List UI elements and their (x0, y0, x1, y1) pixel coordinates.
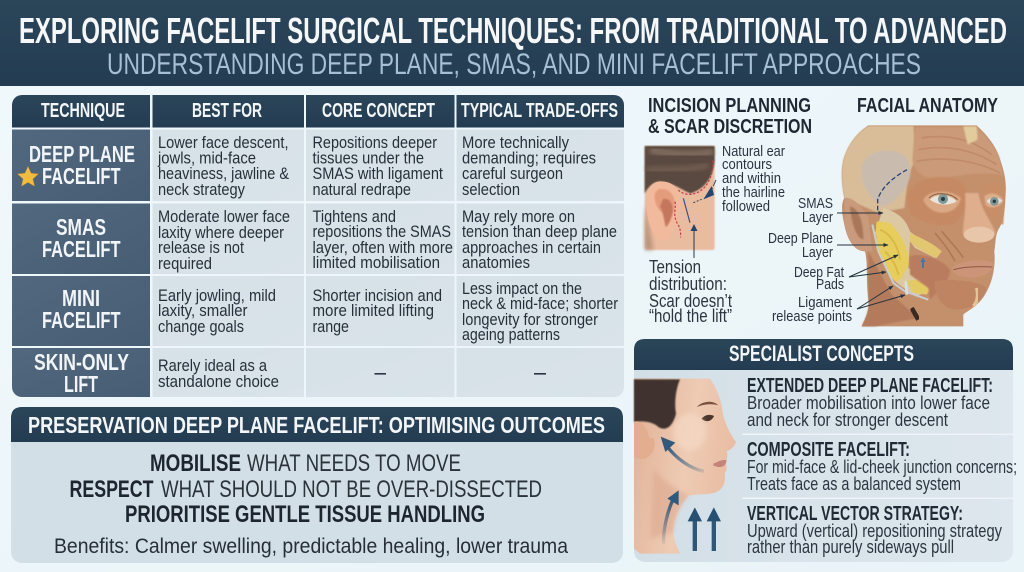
label: smas layer (798, 195, 883, 226)
deep plane: core concept (312, 133, 443, 199)
skin-only: best for (158, 356, 279, 391)
panel: specialist concepts (634, 339, 1017, 562)
arrow: neck lift (663, 490, 679, 544)
tension note: Scar doesn’t (649, 291, 732, 311)
label: deep plane layer: Layer (802, 244, 833, 261)
incision heading (648, 94, 812, 138)
label: ligament release points: Ligament (798, 294, 853, 311)
label: smas layer: SMAS (798, 195, 833, 212)
mini: best for: Early jowling, mild (158, 286, 276, 305)
smas: trade-offs: approaches in certain (462, 238, 601, 257)
smas: trade-offs: anatomies (462, 253, 530, 272)
face anatomy illustration (842, 125, 1006, 326)
panel: preservation deep plane facelift (11, 407, 623, 563)
row label: skin-only lift (34, 349, 129, 397)
eyes (930, 195, 957, 204)
dashed smas line (878, 170, 907, 213)
arrow: vertical right (707, 507, 721, 551)
incision heading: & SCAR DISCRETION (648, 115, 812, 138)
concept: vertical vector strategy: rather than purely sideways pull (747, 537, 954, 557)
deep plane: best for: neck strategy (158, 180, 245, 199)
ear contours note (722, 143, 785, 215)
mini: core concept: Shorter incision and (312, 286, 442, 305)
skin-only: trade-offs dash (534, 373, 546, 375)
arrow: tension (690, 224, 698, 258)
skin-only: best for: Rarely ideal as a (158, 356, 267, 375)
icon: star (18, 166, 38, 186)
line: respect: WHAT SHOULD NOT BE OVER-DISSECTED (161, 476, 542, 503)
deep plane: trade-offs: careful surgeon (462, 164, 563, 183)
profile face illustration (634, 379, 736, 554)
row label: smas facelift (42, 214, 121, 262)
concept: extended deep plane (747, 375, 993, 430)
title banner (0, 0, 1024, 86)
mini: core concept: more limited lifting (312, 301, 434, 320)
label: deep plane layer: Deep Plane (768, 230, 833, 247)
smas: core concept: Tightens and (312, 207, 396, 226)
deep plane: best for: heaviness, jawline & (158, 164, 290, 183)
ear contours note: and within (722, 170, 781, 187)
row label: smas facelift: SMAS (56, 214, 106, 240)
deep plane: core concept: natural redrape (312, 180, 411, 199)
incision heading: INCISION PLANNING (648, 94, 811, 117)
deep plane: best for: jowls, mid-face (157, 148, 256, 168)
smas: core concept: repositions the SMAS (312, 222, 451, 241)
label: smas layer: Layer (802, 209, 833, 226)
concept: composite facelift (747, 439, 1017, 494)
ear contours note: the hairline (722, 184, 785, 201)
label: ligament release points: release points (772, 308, 852, 325)
table header row: TECHNIQUE (41, 99, 125, 122)
mini: trade-offs: Less impact on the (462, 279, 582, 298)
skin-only: best for: standalone choice (158, 372, 279, 391)
mini: best for (158, 286, 276, 336)
skin-only: core concept dash (374, 373, 386, 375)
mini: trade-offs (462, 279, 618, 344)
concept: extended deep plane: and neck for stronger descent (747, 410, 948, 430)
mini: trade-offs: ageing patterns (462, 325, 560, 344)
smas: best for (158, 207, 290, 273)
deep plane: best for (157, 133, 290, 199)
table header row: CORE CONCEPT (322, 99, 435, 122)
deep plane: core concept: tissues under the (312, 148, 424, 168)
line: mobilise (150, 450, 461, 477)
label: deep fat pads: Pads (816, 276, 844, 293)
ear contours note: followed (722, 198, 770, 215)
deep plane: trade-offs (462, 133, 596, 199)
deep plane: core concept: Repositions deeper (312, 133, 437, 152)
mini: core concept: range (312, 317, 349, 336)
mini: trade-offs: longevity for stronger (462, 310, 598, 329)
smas: best for: release is not (158, 238, 244, 257)
line: prioritise: PRIORITISE GENTLE TISSUE HANDLING (125, 501, 485, 528)
row label: mini facelift: FACELIFT (42, 307, 121, 333)
specialist heading: SPECIALIST CONCEPTS (729, 341, 914, 366)
ear illustration (645, 146, 716, 250)
smas: trade-offs: tension than deep plane (462, 222, 617, 241)
row label: mini facelift: MINI (62, 285, 100, 311)
row label: deep plane facelift: DEEP PLANE (29, 141, 135, 167)
panel: incision planning (645, 94, 812, 326)
panel: comparison table (12, 95, 624, 397)
tension note (649, 257, 732, 326)
tension note: “hold the lift” (649, 306, 732, 326)
table header row: BEST FOR (192, 99, 262, 122)
row label: deep plane facelift: FACELIFT (42, 163, 121, 189)
panel: facial anatomy (768, 94, 1006, 326)
table header row: TYPICAL TRADE-OFFS (461, 99, 618, 122)
deep plane: core concept: SMAS with ligament (312, 164, 443, 183)
ear contours note: Natural ear (722, 143, 785, 160)
benefits: Benefits: Calmer swelling, predictable healing, lower trauma (54, 534, 568, 558)
mini: trade-offs: neck & mid-face; shorter (462, 294, 618, 313)
smas: trade-offs (462, 207, 617, 272)
label: ligament release points (772, 286, 905, 325)
mini: best for: change goals (158, 317, 244, 336)
concept: composite facelift: Treats face as a balanced system (747, 474, 961, 494)
label: deep plane layer (768, 230, 888, 261)
smas: best for: required (158, 254, 212, 273)
table header row (41, 99, 618, 122)
row label: skin-only lift: SKIN-ONLY (34, 349, 129, 375)
preservation heading: PRESERVATION DEEP PLANE FACELIFT: OPTIMISING OUTCOMES (28, 412, 605, 438)
line: respect (70, 476, 542, 503)
smas: best for: Moderate lower face (158, 207, 290, 226)
mini: core concept (312, 286, 442, 336)
deep plane: trade-offs: demanding; requires (462, 148, 596, 168)
row label: mini facelift (42, 285, 121, 333)
deep plane: best for: Lower face descent, (158, 133, 288, 152)
arrow: vertical left (688, 507, 702, 551)
concept: vertical vector strategy (747, 503, 1002, 557)
smas: core concept: limited mobilisation (312, 253, 440, 272)
smas: best for: laxity where deeper (158, 223, 284, 242)
smas: core concept (312, 207, 453, 272)
tension note: distribution: (649, 274, 727, 294)
tension note: Tension (649, 257, 701, 277)
arrow: cheek lift (661, 437, 704, 471)
smas: trade-offs: May rely more on (462, 207, 575, 226)
deep plane: trade-offs: selection (462, 180, 520, 199)
row label: skin-only lift: LIFT (64, 371, 98, 397)
deep plane: trade-offs: More technically (462, 133, 569, 152)
concept: composite facelift: COMPOSITE FACELIFT: (747, 439, 910, 461)
concept: extended deep plane: Broader mobilisation into lower face (747, 393, 990, 413)
label: deep fat pads: Deep Fat (794, 264, 845, 281)
line: mobilise: WHAT NEEDS TO MOVE (247, 450, 461, 477)
smas: core concept: layer, often with more (312, 238, 453, 257)
line: respect: RESPECT (70, 476, 154, 503)
label: deep fat pads (794, 255, 898, 293)
line: mobilise: MOBILISE (150, 450, 241, 477)
mini: best for: laxity, smaller (158, 301, 248, 320)
ear contours note: contours (722, 156, 772, 173)
row label: smas facelift: FACELIFT (42, 236, 121, 262)
row label: deep plane facelift (18, 141, 135, 189)
